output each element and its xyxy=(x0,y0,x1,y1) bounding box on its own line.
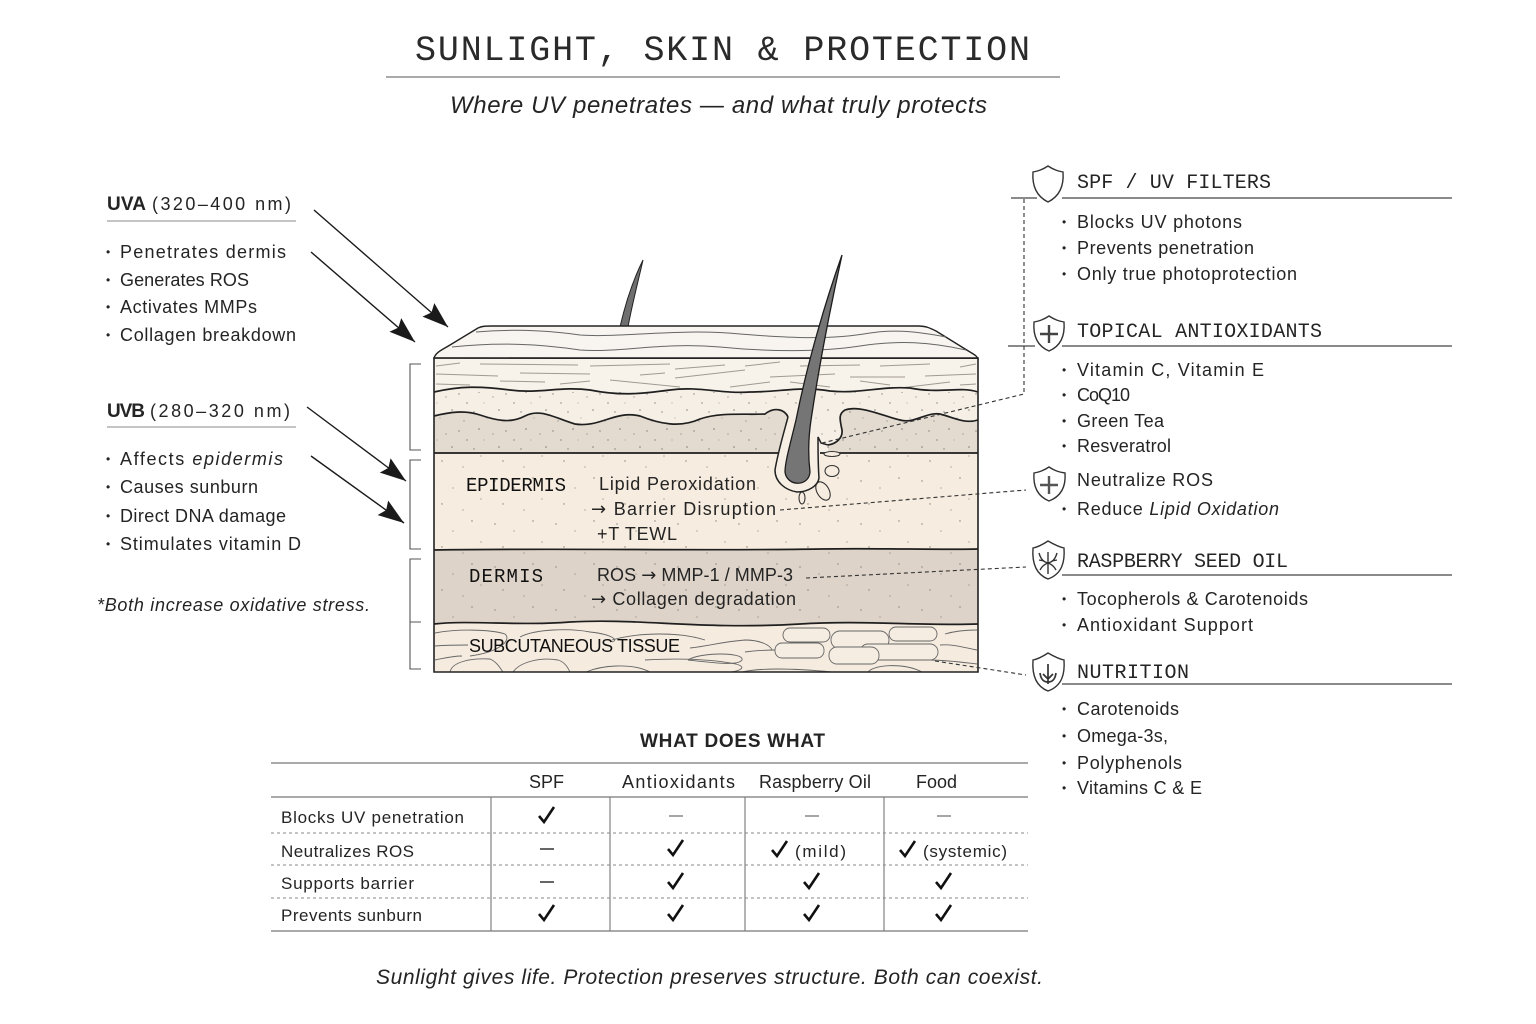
bullets xyxy=(1062,212,1297,284)
row labels: Neutralizes ROS xyxy=(281,842,414,861)
epidermis notes: Lipid Peroxidation xyxy=(599,474,756,494)
bullets: Green Tea xyxy=(1077,411,1165,431)
qualifiers: (systemic) xyxy=(923,842,1007,861)
skin block outline xyxy=(434,358,978,672)
bullet: • xyxy=(1062,502,1066,516)
UVB bullet list: Affects epidermis xyxy=(120,449,283,469)
column headers: Antioxidants xyxy=(622,772,735,792)
label: epidermis: EPIDERMIS xyxy=(466,475,566,497)
bullets: • xyxy=(1062,729,1066,743)
bullets: • xyxy=(1062,618,1066,632)
title rule xyxy=(386,76,1060,78)
bullet: Reduce Lipid Oxidation xyxy=(1077,499,1279,519)
row labels xyxy=(281,808,464,925)
bullets: Resveratrol xyxy=(1077,436,1171,456)
subcutaneous layer xyxy=(434,621,978,672)
bullets: Vitamin C, Vitamin E xyxy=(1077,360,1264,380)
comparison table xyxy=(271,763,1028,931)
check marks xyxy=(539,807,951,920)
dermis layer xyxy=(434,549,978,626)
bullets: • xyxy=(1062,756,1066,770)
panel: UVA xyxy=(106,194,296,345)
dermis notes xyxy=(591,565,796,610)
stratum lines xyxy=(436,362,976,388)
bullets: • xyxy=(1062,414,1066,428)
UVA bullet list: • xyxy=(106,245,110,259)
bullets: Vitamins C & E xyxy=(1077,778,1202,798)
sebaceous glands xyxy=(799,452,840,504)
UVB wavelength: (280–320 nm) xyxy=(150,401,290,421)
stippled granular layer xyxy=(434,387,978,460)
UVA bullet list xyxy=(106,242,296,345)
label: subcutaneous tissue: SUBCUTANEOUS TISSUE xyxy=(469,636,680,656)
skin cross-section diagram xyxy=(434,255,978,672)
epidermis notes: → Barrier Disruption xyxy=(591,499,776,520)
UVB bullet list: • xyxy=(106,537,110,551)
table grid xyxy=(271,763,1028,931)
icon: shield with plant xyxy=(1033,653,1064,691)
small hair xyxy=(620,260,643,327)
closing line: Sunlight gives life. Protection preserves structure. Both can coexist. xyxy=(376,966,1043,989)
bullets: CoQ10 xyxy=(1077,385,1130,405)
heading: SPF / UV FILTERS xyxy=(1077,172,1271,195)
UVA bullet list: • xyxy=(106,273,110,287)
bullets: • xyxy=(1062,439,1066,453)
bullets: Polyphenols xyxy=(1077,753,1182,773)
dermis notes: → Collagen degradation xyxy=(591,589,796,610)
UVB bullet list: • xyxy=(106,480,110,494)
UVA bullet list: Collagen breakdown xyxy=(120,325,296,345)
UVA bullet list: • xyxy=(106,328,110,342)
large hair xyxy=(785,255,842,483)
qualifiers xyxy=(795,842,1007,861)
UVB heading: UVB xyxy=(107,401,145,422)
qualifiers: (mild) xyxy=(795,842,846,861)
bullets: Carotenoids xyxy=(1077,699,1179,719)
heading: NUTRITION xyxy=(1077,662,1189,685)
icon: shield plus xyxy=(1034,467,1065,501)
skin top face xyxy=(434,326,978,359)
bullets: • xyxy=(1062,241,1066,255)
UVA heading: UVA xyxy=(107,194,146,215)
bullets: Only true photoprotection xyxy=(1077,264,1297,284)
table heading: WHAT DOES WHAT xyxy=(640,731,825,752)
dashes xyxy=(540,816,951,882)
heading: TOPICAL ANTIOXIDANTS xyxy=(1077,321,1322,344)
follicle sheath xyxy=(775,417,828,492)
row labels: Blocks UV penetration xyxy=(281,808,464,827)
row labels: Prevents sunburn xyxy=(281,906,422,925)
UVB bullet list: Stimulates vitamin D xyxy=(120,534,301,554)
text: Neutralize ROS xyxy=(1077,470,1213,490)
icon: shield xyxy=(1033,166,1063,202)
hair follicle xyxy=(775,255,842,504)
darker basal layer xyxy=(434,410,788,453)
epidermis layer xyxy=(434,453,978,550)
UVA bullet list: Penetrates dermis xyxy=(120,242,286,262)
UVA bullet list: Generates ROS xyxy=(120,270,249,290)
column headers xyxy=(529,772,957,792)
bullets: • xyxy=(1062,781,1066,795)
UVA bullet list: Activates MMPs xyxy=(120,297,257,317)
panel: neutralize ROS xyxy=(1034,467,1279,519)
UVA bullet list: • xyxy=(106,300,110,314)
bullets: Tocopherols & Carotenoids xyxy=(1077,589,1308,609)
dermis notes: ROS → MMP-1 / MMP-3 xyxy=(597,565,793,586)
icon: shield plus xyxy=(1034,316,1064,351)
bullets xyxy=(1062,589,1308,635)
heading: RASPBERRY SEED OIL xyxy=(1077,551,1288,574)
row labels: Supports barrier xyxy=(281,874,414,893)
footnote: *Both increase oxidative stress. xyxy=(97,595,370,615)
bullets xyxy=(1062,360,1264,456)
column headers: Raspberry Oil xyxy=(759,772,871,792)
column headers: SPF xyxy=(529,772,564,792)
icon: shield with seed branch xyxy=(1033,541,1064,579)
bullets: • xyxy=(1062,267,1066,281)
bullets: Prevents penetration xyxy=(1077,238,1254,258)
epidermis notes: +T TEWL xyxy=(597,524,677,544)
UVB bullet list: • xyxy=(106,509,110,523)
fat cells xyxy=(435,627,977,672)
stratum corneum layer xyxy=(434,359,978,394)
column headers: Food xyxy=(916,772,957,792)
panel: SPF / UV filters xyxy=(1011,166,1452,284)
bullets: • xyxy=(1062,388,1066,402)
bullets: • xyxy=(1062,215,1066,229)
bullets: Antioxidant Support xyxy=(1077,615,1253,635)
layer boundary lines xyxy=(434,387,978,626)
arrows: UV rays xyxy=(307,210,448,523)
panel: topical antioxidants xyxy=(1008,316,1452,456)
UVA wavelength: (320–400 nm) xyxy=(152,194,291,214)
UVB bullet list: • xyxy=(106,452,110,466)
bullets xyxy=(1062,699,1202,798)
panel: UVB xyxy=(106,401,301,554)
UVB bullet list xyxy=(106,449,301,554)
bullets: • xyxy=(1062,592,1066,606)
brackets xyxy=(410,364,421,669)
panel: raspberry seed oil xyxy=(1033,541,1452,635)
panel: nutrition xyxy=(1033,653,1452,798)
label: dermis: DERMIS xyxy=(469,566,543,588)
bullets: Blocks UV photons xyxy=(1077,212,1242,232)
UVB bullet list: Causes sunburn xyxy=(120,477,258,497)
title: SUNLIGHT, SKIN & PROTECTION xyxy=(415,31,1030,71)
bullets: • xyxy=(1062,363,1066,377)
UVB bullet list: Direct DNA damage xyxy=(120,506,286,526)
dashed leader lines xyxy=(780,199,1026,675)
bullets: Omega-3s, xyxy=(1077,726,1168,746)
subtitle: Where UV penetrates — and what truly protects xyxy=(450,92,987,119)
bullets: • xyxy=(1062,702,1066,716)
epidermis notes xyxy=(591,474,776,544)
